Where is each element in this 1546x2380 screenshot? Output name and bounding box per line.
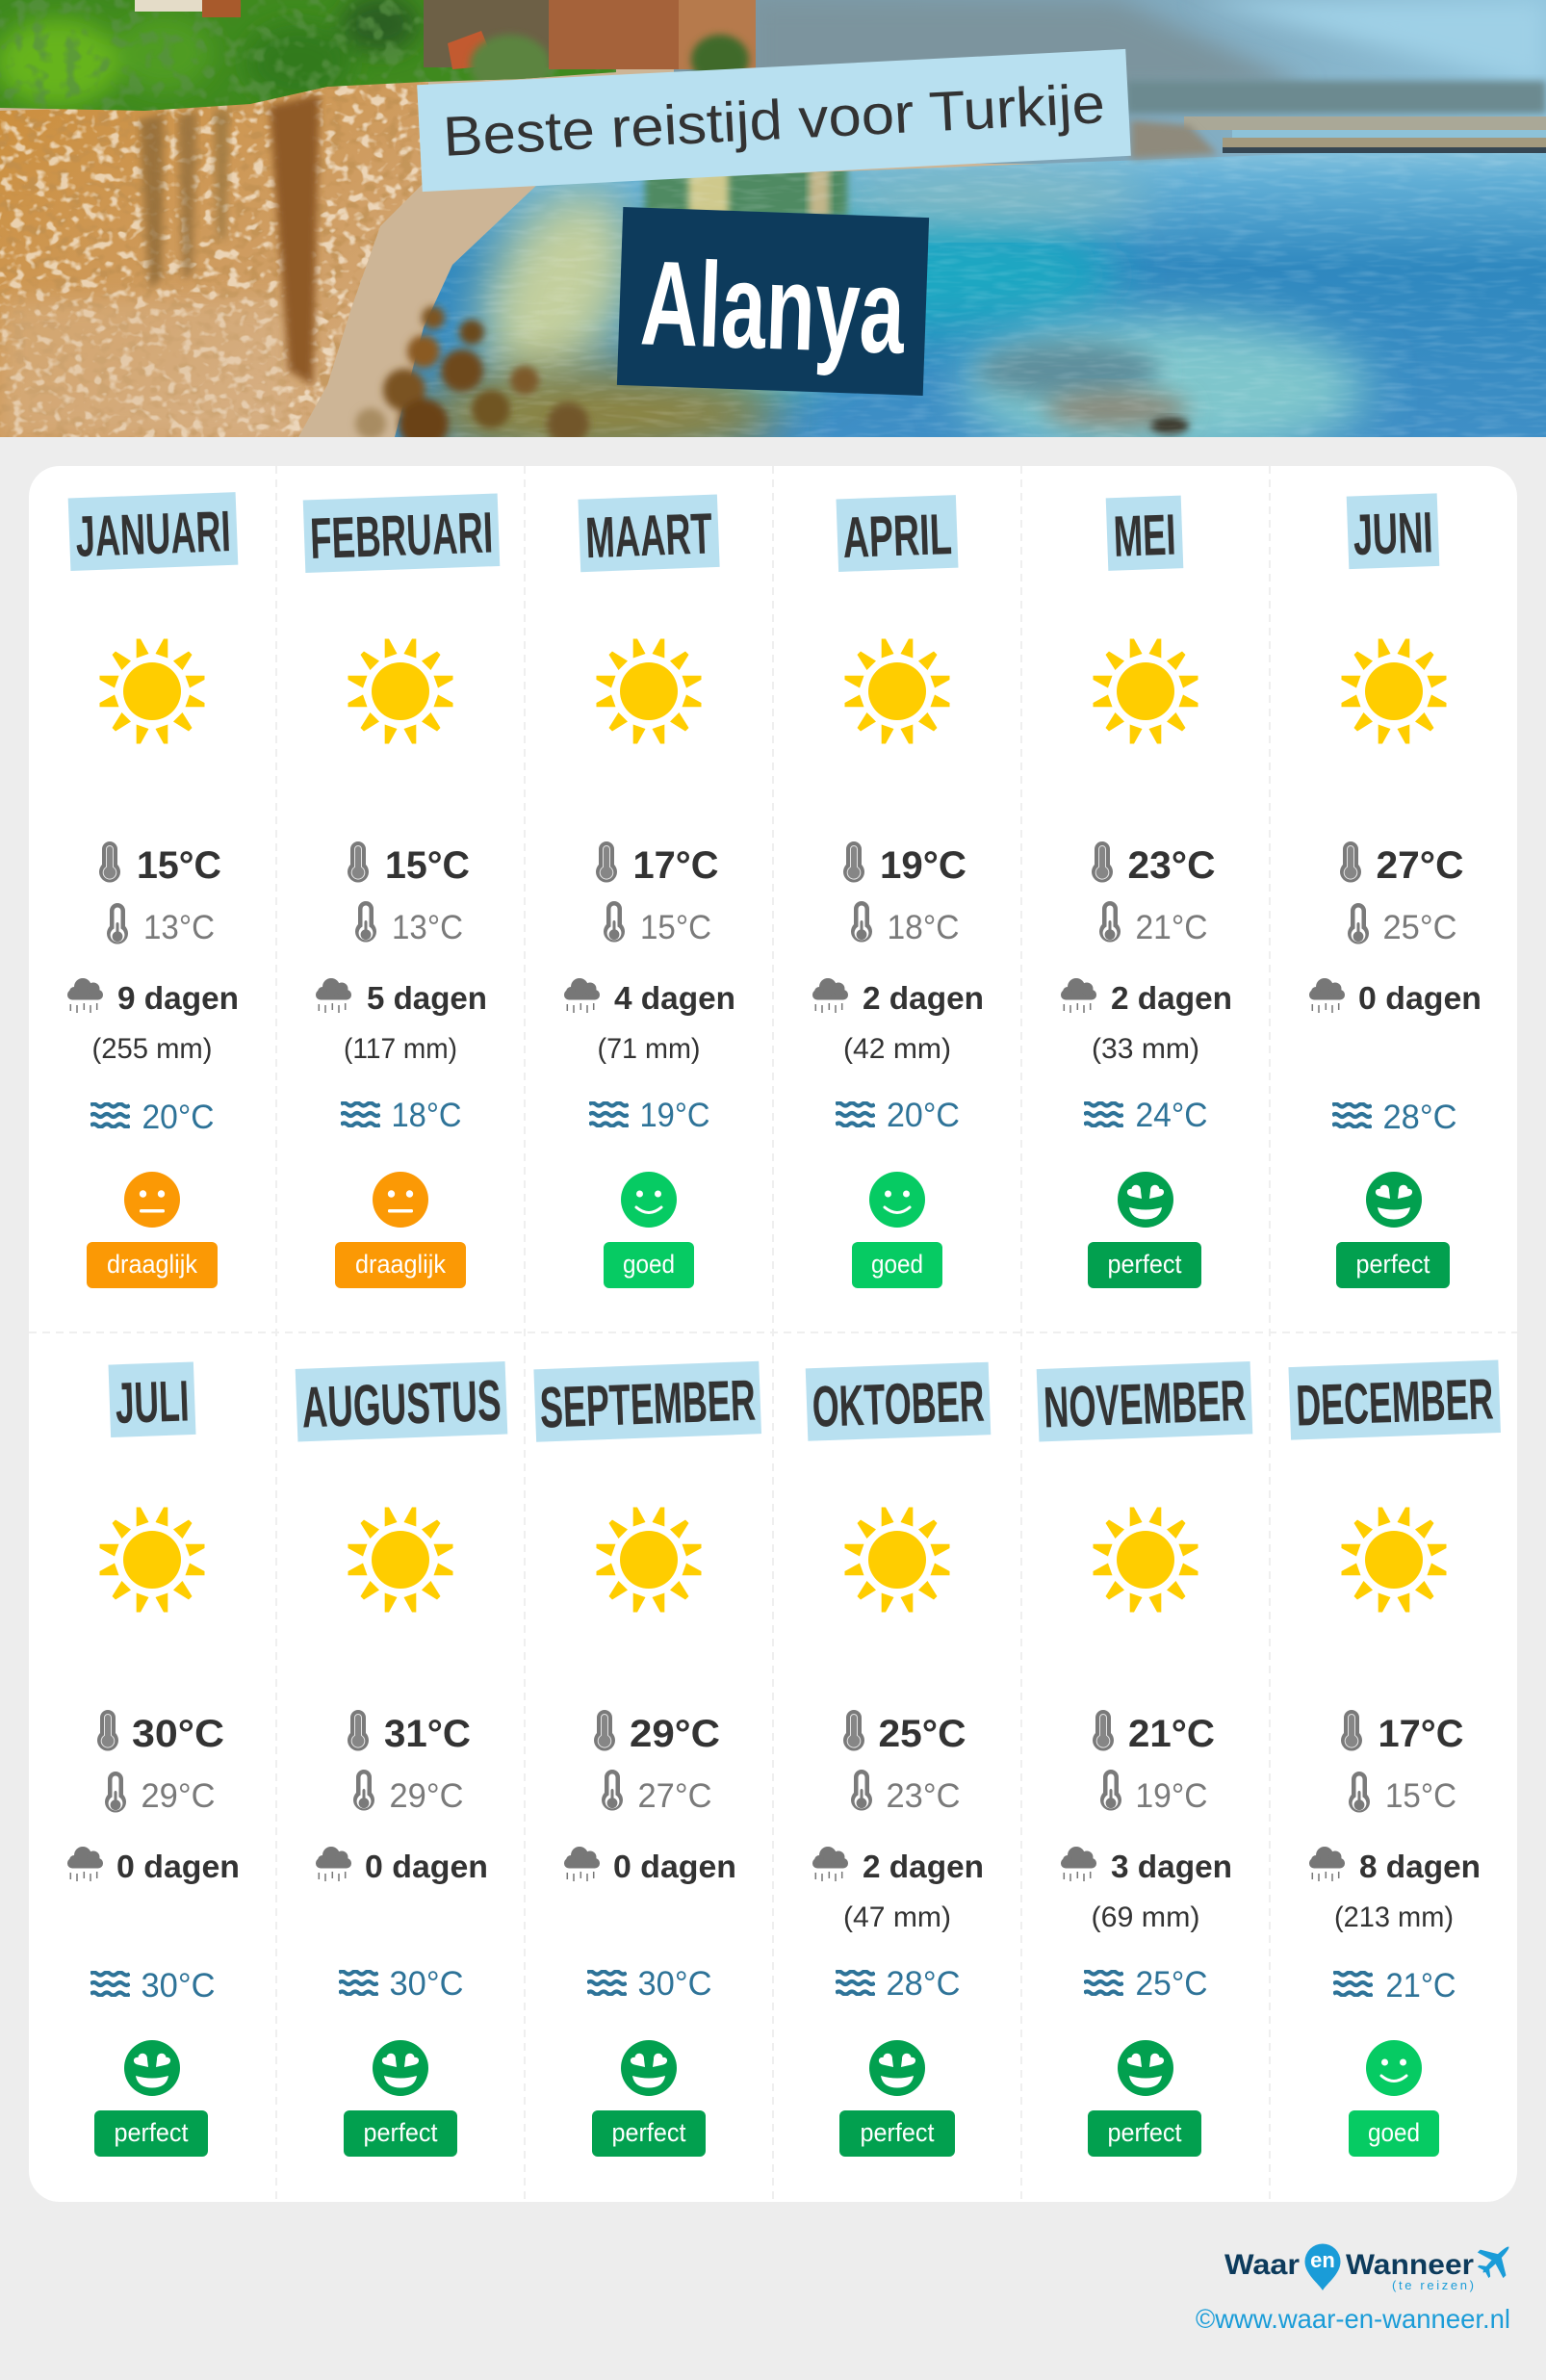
rainfall: (69 mm) [1091,1901,1200,1933]
max temperature: 19°C [880,844,966,887]
rainfall: (255 mm) [92,1033,212,1065]
icon: sun [100,639,204,743]
logo: Waar en Wanneer [1224,2234,1522,2292]
icon: rain [564,1847,600,1881]
rating badge: perfect [114,2118,189,2147]
rating badge: goed [1368,2118,1420,2147]
rating badge [344,2110,457,2157]
icon: thermometer min [105,1772,126,1813]
max temperature: 29°C [630,1713,720,1755]
month label: NOVEMBER [1043,1368,1247,1440]
rating badge: goed [871,1250,923,1279]
min temperature: 19°C [1136,1777,1207,1815]
month column: oktober [806,1362,991,2157]
month label [1347,493,1439,569]
icon: heart-eyes face [124,2040,180,2096]
icon: thermometer min [602,1770,623,1811]
banner: Beste reistijd voor Turkije [417,49,1131,192]
rating badge [1349,2110,1439,2157]
icon: thermometer min [1349,1772,1370,1813]
rating badge: perfect [612,2118,686,2147]
rain days: 5 dagen [367,980,487,1016]
rating badge: perfect [861,2118,935,2147]
month label [109,1361,195,1437]
month column: mei [1061,496,1232,1288]
month label [1106,496,1183,571]
icon: sun [348,1508,452,1612]
min temperature: 29°C [389,1777,464,1815]
sea temperature: 28°C [886,1965,961,2003]
icon: thermometer max [843,841,864,883]
rating badge: perfect [1107,2118,1182,2147]
icon: heart-eyes face [373,2040,428,2096]
icon: smiling face [621,1172,677,1228]
month label [1037,1361,1252,1442]
min temperature: 21°C [1136,909,1207,946]
icon: neutral face [373,1172,428,1228]
icon: waves [1084,1103,1123,1126]
icon: map pin [1305,2243,1340,2290]
sea temperature: 21°C [1386,1967,1456,2005]
rating badge [604,1242,694,1288]
icon: sun [1094,639,1198,743]
rating badge: perfect [1355,1250,1430,1279]
month label: JULI [115,1368,191,1436]
icon: sun [845,1508,949,1612]
sea temperature: 19°C [639,1097,710,1134]
icon: rain [812,1847,848,1881]
month label [806,1362,991,1441]
rain days: 2 dagen [863,980,984,1016]
rating badge: perfect [1107,1250,1182,1279]
sea temperature: 28°C [1382,1099,1457,1136]
icon: thermometer min [1348,903,1369,944]
icon: sun [597,639,701,743]
title: Alanya: Alanya [638,236,908,379]
sea temperature: 30°C [637,1965,712,2003]
icon: neutral face [124,1172,180,1228]
icon: rain [316,978,351,1013]
min temperature: 13°C [392,909,463,946]
hero photo: Alanya coast [0,0,1546,462]
month column: september [533,1361,761,2157]
icon: thermometer max [1340,841,1361,883]
icon: thermometer max [348,1710,369,1751]
rating badge [1088,2110,1201,2157]
min temperature: 15°C [1385,1777,1456,1815]
sea temperature: 25°C [1136,1965,1207,2003]
icon: rain [812,978,848,1013]
max temperature: 31°C [384,1713,471,1755]
month label: APRIL [841,502,953,570]
month column: april [812,495,984,1288]
icon: sun [597,1508,701,1612]
rating badge [335,1242,466,1288]
min temperature: 15°C [640,909,711,946]
rating badge [1088,1242,1201,1288]
icon: map pin: en [1310,2248,1335,2272]
month column: februari [303,493,500,1288]
sea temperature: 20°C [142,1099,214,1136]
icon: waves [1332,1103,1372,1126]
rating badge [87,1242,218,1288]
sea temperature: 30°C [389,1965,464,2003]
rain days: 2 dagen [1111,980,1232,1016]
icon: thermometer min [851,901,872,943]
min temperature: 13°C [143,909,215,946]
min temperature: 25°C [1382,909,1457,946]
max temperature: 17°C [633,844,718,887]
max temperature: 27°C [1377,844,1463,887]
month column: december [1288,1360,1501,2157]
rating badge [94,2110,208,2157]
title: Alanya [617,207,929,396]
sea temperature: 18°C [391,1097,462,1134]
rain days: 4 dagen [614,980,735,1016]
icon: thermometer min [107,903,128,944]
rating badge [852,1242,942,1288]
rating badge [1336,1242,1450,1288]
icon: thermometer max [594,1710,615,1751]
month label [303,493,500,573]
icon: thermometer max [97,1710,118,1751]
month label [68,492,238,571]
sea temperature: 20°C [887,1097,960,1134]
max temperature: 30°C [132,1713,224,1755]
rain days: 2 dagen [863,1849,984,1884]
rainfall: (213 mm) [1334,1901,1454,1933]
icon: waves [90,1972,130,1995]
min temperature: 29°C [141,1777,216,1815]
rain days: 8 dagen [1359,1849,1481,1884]
month label: SEPTEMBER [539,1368,757,1440]
max temperature: 25°C [878,1713,966,1755]
icon: rain [564,978,600,1013]
icon: thermometer max [1341,1710,1362,1751]
icon: thermometer max [596,841,617,883]
month label: AUGUSTUS [300,1368,502,1439]
rating badge: draaglijk [107,1250,197,1279]
rain days: 3 dagen [1111,1849,1232,1884]
max temperature: 23°C [1128,844,1215,887]
icon: rain [1061,978,1096,1013]
rating badge: perfect [364,2118,438,2147]
rain days: 0 dagen [365,1849,488,1884]
month column: november [1037,1361,1252,2157]
rating badge: goed [623,1250,675,1279]
icon: waves [836,1972,875,1995]
icon: heart-eyes face [869,2040,925,2096]
rain days: 9 dagen [117,980,239,1016]
icon: heart-eyes face [1366,1172,1422,1228]
rainfall: (33 mm) [1092,1033,1199,1065]
icon: thermometer min [1100,1770,1121,1811]
icon: sun [1342,639,1446,743]
website credit: ©www.waar-en-wanneer.nl [1196,2304,1510,2334]
logo: Waar en Wanneer: (te reizen) [1392,2278,1474,2292]
icon: thermometer max [1093,1710,1114,1751]
icon: airplane [1470,2234,1522,2286]
icon: sun [845,639,949,743]
month column: augustus [296,1361,507,2157]
icon: smiling face [1366,2040,1422,2096]
month column: juni [1309,493,1482,1288]
icon: waves [836,1103,875,1126]
max temperature: 17°C [1379,1713,1463,1755]
icon: rain [316,1847,351,1881]
sea temperature: 24°C [1136,1097,1207,1134]
icon: waves [341,1103,380,1126]
logo: Waar en Wanneer: Waar [1224,2249,1300,2281]
icon: sun [100,1508,204,1612]
max temperature: 15°C [137,844,221,887]
icon: rain [1061,1847,1096,1881]
icon: thermometer min [355,901,376,943]
icon: sun [1094,1508,1198,1612]
rainfall: (47 mm) [843,1901,951,1933]
month label [533,1361,761,1442]
rainfall: (117 mm) [344,1033,457,1065]
rainfall: (42 mm) [843,1033,951,1065]
min temperature: 23°C [886,1777,961,1815]
icon: thermometer min [604,901,625,943]
icon: heart-eyes face [1118,2040,1173,2096]
rating badge [592,2110,706,2157]
rain days: 0 dagen [613,1849,736,1884]
icon: waves [1084,1972,1123,1995]
month label [296,1361,507,1441]
month label: JUNI [1353,500,1434,567]
icon: thermometer min [851,1770,872,1811]
icon: waves [90,1103,130,1126]
logo: Waar en Wanneer: Wanneer [1346,2249,1474,2281]
rating badge [839,2110,955,2157]
icon: heart-eyes face [1118,1172,1173,1228]
icon: waves [339,1972,378,1995]
icon: rain [1309,1847,1345,1881]
icon: waves [589,1103,629,1126]
icon: sun [1342,1508,1446,1612]
month column: januari [67,492,239,1288]
icon: thermometer max [843,1710,864,1751]
icon: rain [67,1847,103,1881]
month label [837,495,958,572]
rating badge: draaglijk [355,1250,446,1279]
rain days: 0 dagen [1358,980,1482,1016]
icon: thermometer min [353,1770,374,1811]
month label: FEBRUARI [309,500,494,571]
panel: climate table [29,466,1517,2202]
rainfall: (71 mm) [597,1033,701,1065]
month label: MAART [584,501,713,570]
icon: thermometer max [1092,841,1113,883]
icon: sun [348,639,452,743]
max temperature: 15°C [385,844,470,887]
icon: waves [1333,1972,1373,1995]
rain days: 0 dagen [116,1849,240,1884]
icon: thermometer min [1099,901,1121,943]
month column: juli [67,1361,240,2157]
icon: smiling face [869,1172,925,1228]
icon: thermometer max [99,841,120,883]
icon: rain [67,978,103,1013]
month label: MEI [1113,503,1177,569]
icon: waves [587,1972,627,1995]
min temperature: 27°C [637,1777,712,1815]
month label: JANUARI [74,499,232,569]
month column: maart [564,494,735,1288]
min temperature: 18°C [888,909,959,946]
sea temperature: 30°C [141,1967,216,2005]
max temperature: 21°C [1128,1713,1215,1755]
month label: OKTOBER [812,1369,986,1439]
icon: heart-eyes face [621,2040,677,2096]
banner: Beste reistijd voor Turkije: Beste reistijd voor Turkije [442,72,1106,168]
month label [578,494,720,572]
icon: rain [1309,978,1345,1013]
icon: thermometer max [348,841,369,883]
